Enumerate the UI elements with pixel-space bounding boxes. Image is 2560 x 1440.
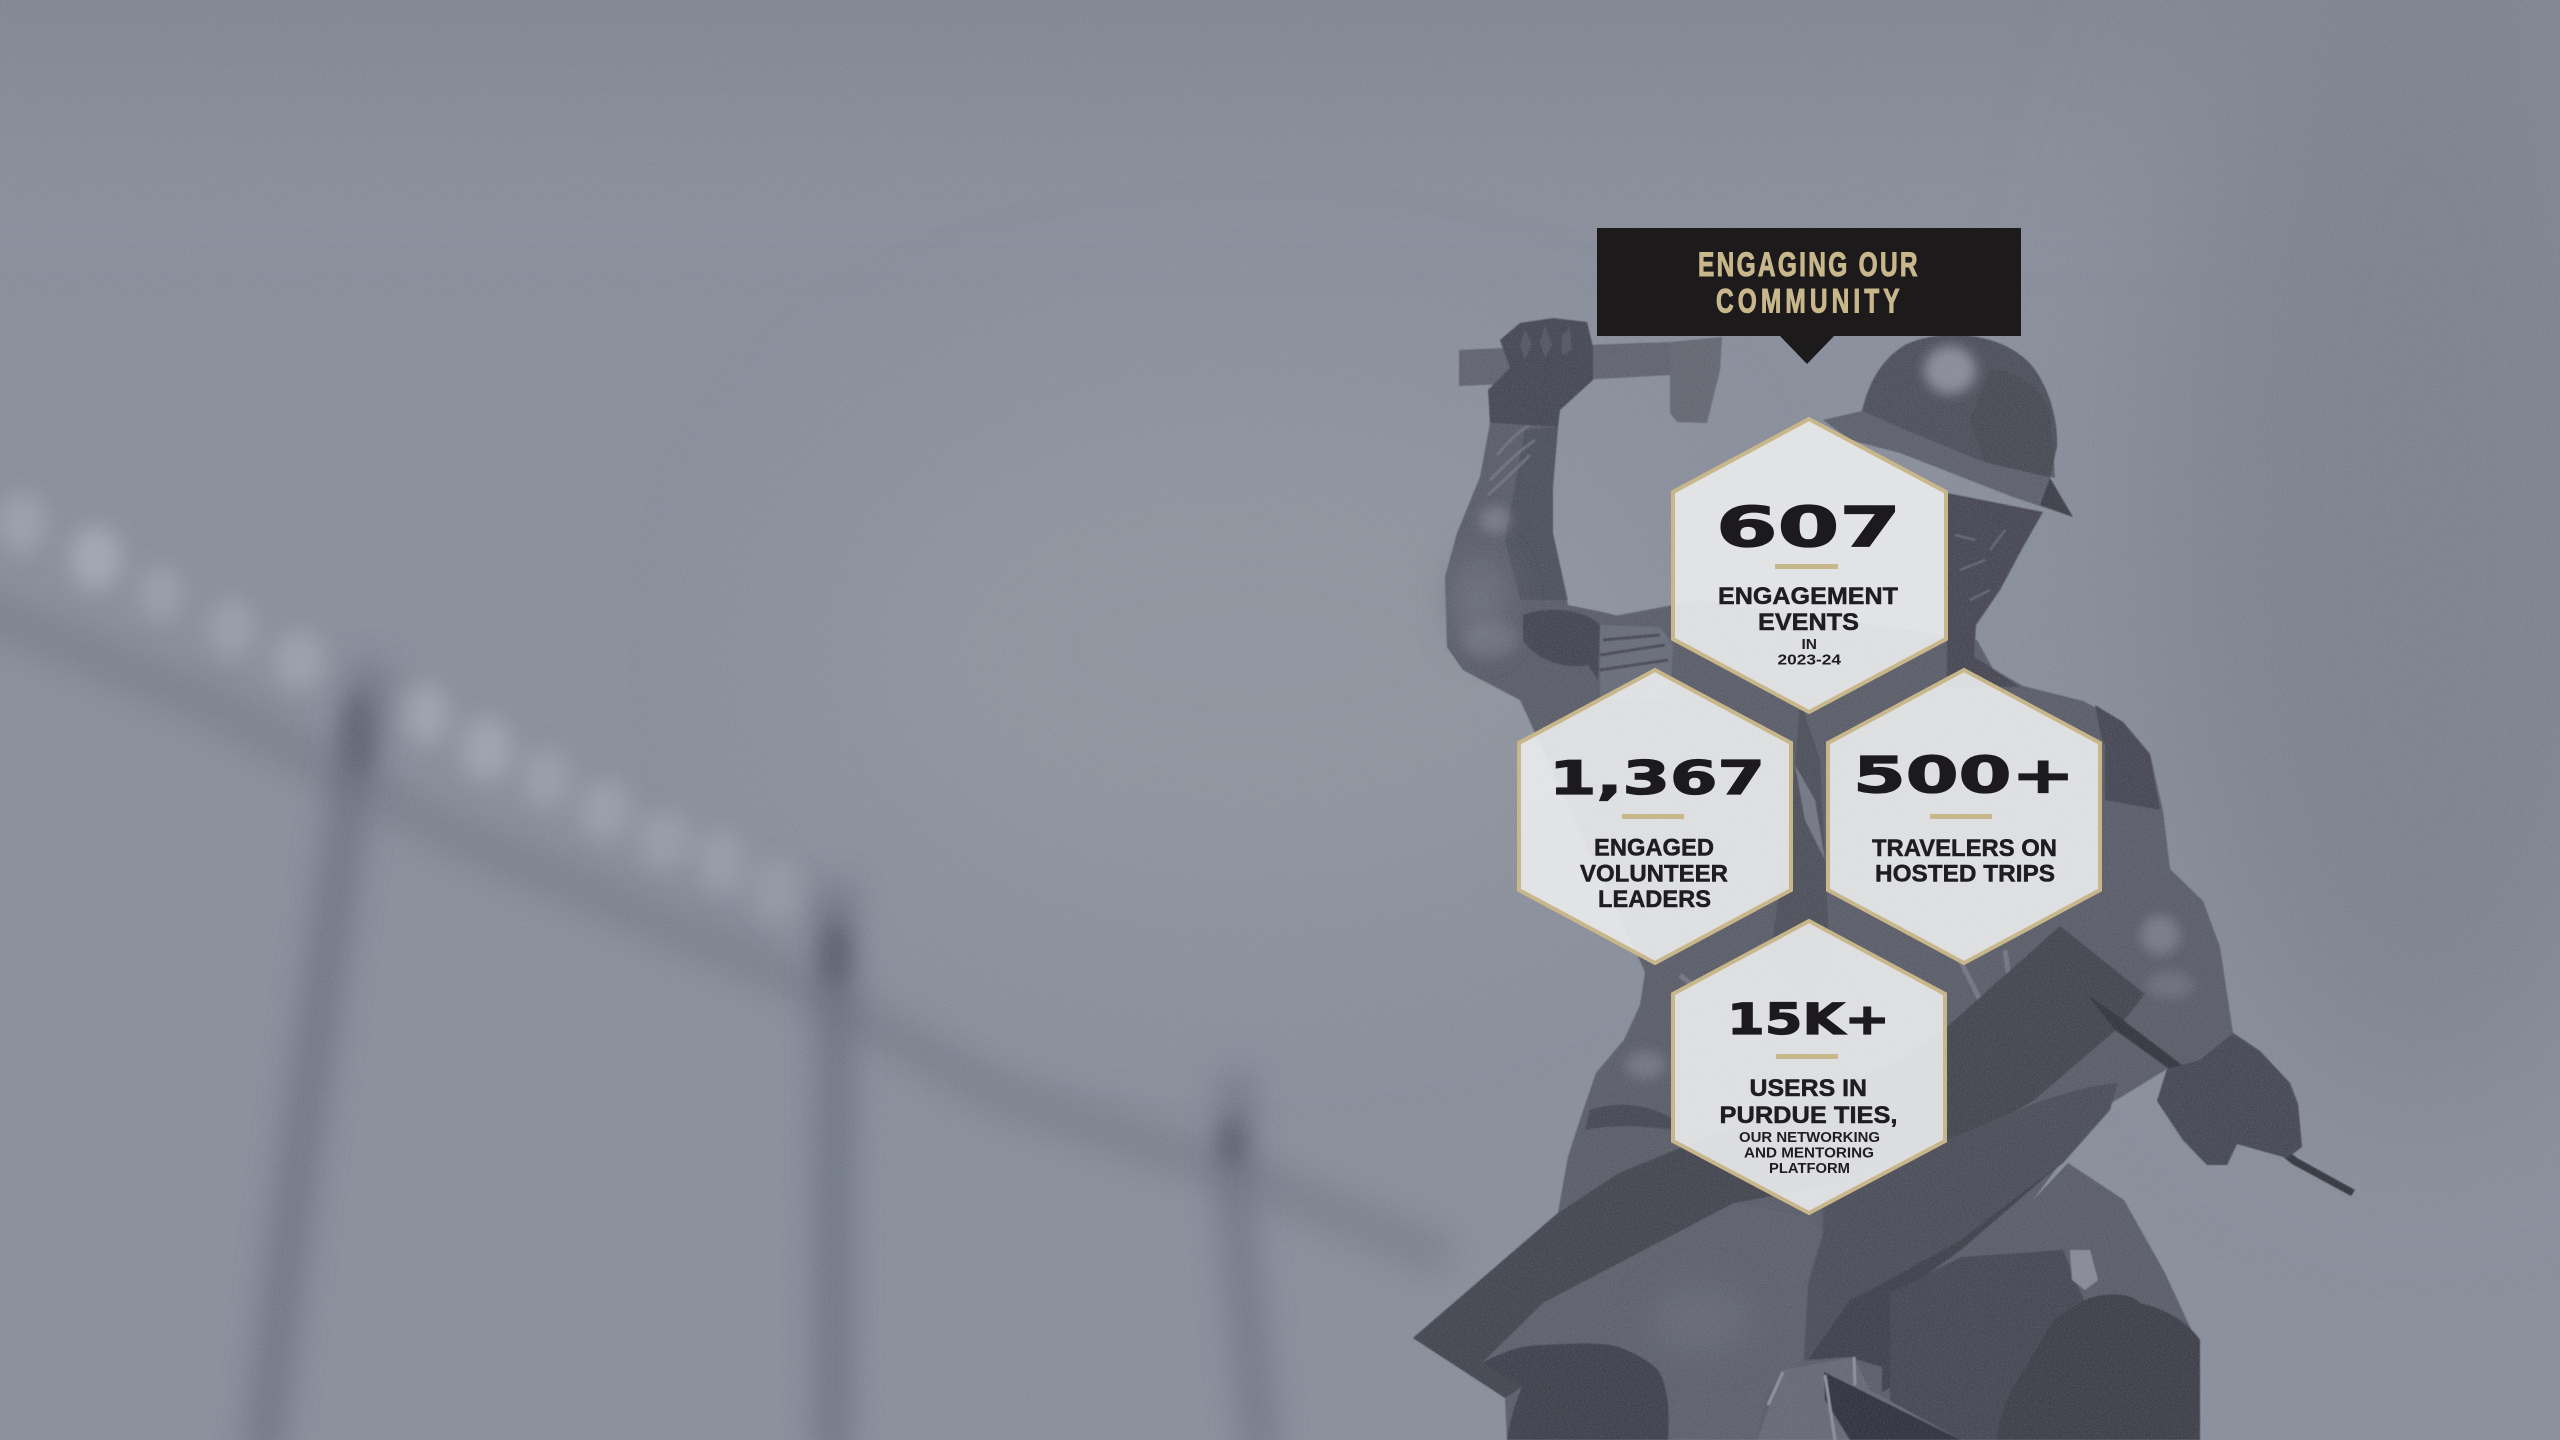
forearm tendons	[1488, 425, 1535, 495]
hip and thigh midtone	[1558, 1030, 1680, 1213]
anvil body	[1482, 1203, 1823, 1440]
callout banner: Engaging Our Community	[1597, 228, 2021, 364]
label: AND MENTORING	[1744, 1146, 1874, 1162]
shirt folds between panels	[1680, 700, 2010, 1010]
biceps	[1523, 610, 1600, 680]
dark anvil band	[1413, 926, 2145, 1398]
label	[1718, 583, 1898, 668]
label: VOLUNTEER	[1580, 860, 1728, 888]
banner text line 1: ENGAGING OUR	[1698, 246, 1918, 284]
label: HOSTED TRIPS	[1875, 860, 2055, 888]
gold rule	[1776, 1054, 1838, 1059]
stat number: 1,367	[1549, 751, 1765, 805]
hexagon: 500+ travelers	[1828, 670, 2100, 963]
banner text line 2: COMMUNITY	[1716, 283, 1900, 321]
stat number: 607	[1716, 495, 1901, 559]
right leg shadow	[1890, 1250, 2084, 1440]
arm shading	[1505, 427, 1568, 600]
chisel	[2088, 995, 2355, 1196]
hip fold	[1585, 1105, 1675, 1130]
label: ENGAGED	[1594, 834, 1714, 862]
fence post 1	[262, 665, 372, 1440]
label: 2023-24	[1778, 652, 1841, 668]
sleeve	[1600, 625, 1673, 700]
chisel hand	[2157, 1033, 2302, 1165]
statue: blacksmith figure	[1413, 318, 2355, 1440]
stat number: 500+	[1853, 746, 2075, 804]
label: PURDUE TIES,	[1720, 1102, 1898, 1129]
left foot dark	[1482, 1343, 1669, 1440]
label: EVENTS	[1758, 609, 1859, 636]
fence rail shadow	[0, 600, 1450, 1260]
label	[1872, 835, 2057, 888]
helmet side shadow	[1970, 370, 2055, 478]
stat number: 15K+	[1727, 995, 1890, 1045]
label: IN	[1802, 637, 1817, 653]
fist fingers	[1520, 325, 1572, 360]
hammer head	[1670, 337, 1722, 423]
label: PLATFORM	[1769, 1161, 1850, 1177]
hammer handle	[1459, 342, 1670, 386]
shoulder dark	[2095, 705, 2150, 765]
label	[1720, 1075, 1898, 1177]
helmet dome	[1862, 335, 2057, 478]
right knee dark	[1997, 1294, 2200, 1440]
raised arm	[1445, 423, 1690, 760]
hexagon: 607 engagement events	[1673, 419, 1946, 712]
hexagon: 15K+ users	[1673, 921, 1945, 1213]
label: LEADERS	[1598, 886, 1711, 913]
tool box	[1757, 1357, 1961, 1440]
hexagon: 1,367 volunteer leaders	[1519, 670, 1791, 963]
post caps	[341, 693, 375, 777]
gold rule	[1930, 814, 1992, 819]
anvil horn	[1804, 1083, 2118, 1392]
fence post 2	[832, 885, 836, 1440]
gold rule	[1775, 564, 1838, 569]
label: OUR NETWORKING	[1739, 1130, 1880, 1146]
label	[1580, 834, 1728, 913]
helmet brim	[1823, 411, 2073, 517]
helmet highlight	[1924, 346, 1976, 394]
label: ENGAGEMENT	[1718, 583, 1898, 610]
label: USERS IN	[1750, 1075, 1867, 1102]
right arm highlights	[2140, 915, 2180, 955]
collar and neck	[1947, 493, 2043, 687]
knee highlight	[2070, 1250, 2098, 1290]
gold rule	[1622, 814, 1684, 819]
horn dark underside	[1808, 1160, 2065, 1392]
label: TRAVELERS ON	[1872, 835, 2057, 862]
torso and right arm silhouette	[1413, 600, 2302, 1440]
fence post 3	[1235, 1075, 1262, 1440]
neck and face detail	[1955, 530, 2005, 600]
fist	[1488, 318, 1593, 427]
bokeh lights along the rail	[0, 493, 801, 922]
